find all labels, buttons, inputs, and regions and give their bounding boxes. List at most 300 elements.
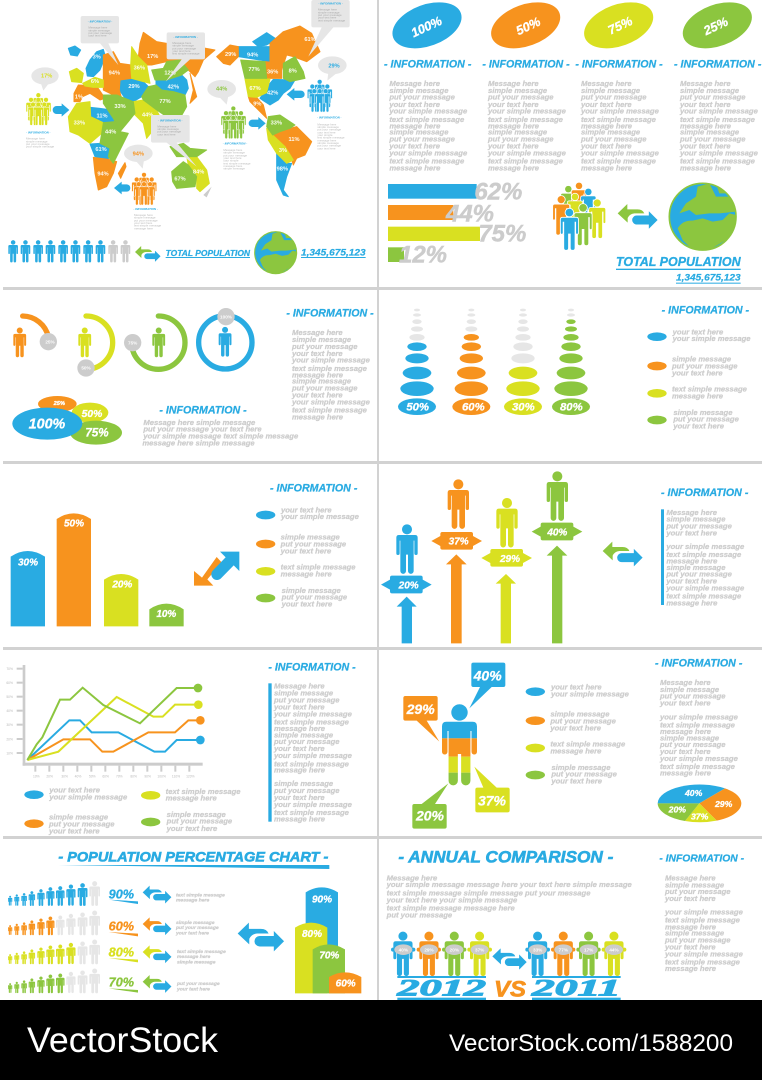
text block lower: message here simple message — [142, 438, 255, 447]
2012 figures: 20% — [450, 947, 460, 952]
map percentage labels: 29% — [225, 52, 236, 58]
text block right: text simple message — [665, 916, 741, 925]
info note blue crowd: put your message — [317, 128, 341, 132]
text column 1: text simple message — [389, 157, 465, 166]
text block right: Message here — [665, 874, 716, 883]
text column 3: put your message — [580, 93, 647, 102]
heading: - INFORMATION - — [268, 661, 356, 673]
axis labels: 50% — [89, 774, 96, 778]
stack 80%: 80% — [560, 401, 583, 413]
axis labels: 110% — [172, 774, 180, 778]
horizontal bar chart: 62% — [474, 178, 522, 205]
2011 label: 2011 — [530, 976, 621, 1002]
column 50% — [57, 513, 91, 626]
info note yellow crowd: - INFORMATION - — [26, 130, 51, 134]
callout 29% — [403, 696, 439, 742]
text block lower: your simple message text simple message — [142, 432, 299, 441]
map callout: europe: Message here — [88, 26, 108, 30]
row label 70%: 70% — [109, 976, 134, 990]
heading: - INFORMATION - — [661, 487, 749, 499]
speech bubble 29% — [318, 56, 347, 81]
legend: your text here — [671, 368, 723, 377]
info note orange crowd — [133, 207, 162, 230]
text block right: your simple message — [291, 397, 371, 406]
text block: Message here — [666, 508, 718, 517]
double arrow — [135, 246, 161, 263]
text column 4: your simple message — [679, 148, 759, 157]
text block: Message here — [660, 678, 711, 687]
text column 3: your simple message — [580, 148, 660, 157]
legend: your text here — [550, 777, 603, 786]
people row orange 60% — [8, 910, 100, 935]
axis labels: 70% — [116, 774, 123, 778]
text column 3: your text here — [580, 100, 632, 109]
row arrow blue — [143, 886, 172, 904]
heading 1: - INFORMATION - — [384, 59, 472, 71]
row messages: your text here — [176, 986, 210, 992]
text block: put your message — [273, 737, 340, 746]
legend: put your message — [549, 716, 617, 725]
double arrow — [618, 204, 658, 230]
map percentage labels: 33% — [271, 121, 282, 127]
map percentage labels: 67% — [174, 177, 186, 183]
text column 2: simple message — [488, 128, 548, 137]
row label 90%: 90% — [109, 887, 134, 901]
map percentage labels: 94% — [247, 53, 258, 59]
text column 4: put your message — [679, 134, 746, 143]
text column 1: your text here — [388, 141, 441, 150]
info note blue crowd: put your message — [317, 144, 341, 148]
text block: your simple message — [273, 800, 353, 809]
row messages: simple message — [176, 920, 215, 926]
map callout: europe: simple message — [88, 28, 110, 32]
speech bubble 17% — [31, 67, 59, 91]
text block: message here — [660, 727, 712, 736]
text column 2: your simple message — [487, 148, 567, 157]
text column 4: simple message — [680, 86, 740, 95]
text block right: put your message — [291, 383, 358, 392]
row messages: text simple message — [176, 892, 225, 898]
text column 4: Message here — [680, 79, 731, 88]
axis labels: 100% — [157, 774, 166, 778]
text column 4: put your message — [679, 93, 746, 102]
info note yellow crowd: Message here — [26, 137, 45, 141]
domed bars — [295, 887, 361, 993]
axis labels — [6, 667, 195, 778]
text column 3: simple message — [581, 86, 641, 95]
text column 3: text simple message — [581, 115, 657, 124]
info note green crowd: text simple message — [223, 161, 251, 165]
map percentage labels: 12% — [164, 71, 176, 77]
text column 2: message here — [488, 122, 540, 131]
row messages: simple message — [177, 959, 216, 965]
legend: your simple message — [48, 792, 128, 801]
map callout: australia: simple message — [157, 127, 179, 131]
info note orange crowd: simple message — [134, 216, 156, 220]
text block: simple message — [660, 685, 720, 694]
population person row — [8, 240, 130, 262]
map callout: north america: Message here — [318, 8, 337, 12]
text block: Message here — [274, 682, 325, 691]
text block right: your text here — [291, 390, 343, 399]
radial 100%: 100% — [220, 314, 233, 319]
legend: your text here — [550, 682, 602, 691]
overlapping ellipses — [12, 396, 122, 445]
legend: your text here — [48, 826, 100, 835]
horizontal bar chart: 75% — [478, 221, 526, 248]
double arrow — [492, 948, 527, 971]
text column 3: put your message — [580, 134, 647, 143]
text block: text simple message — [274, 808, 350, 817]
text block left: Message here — [387, 874, 438, 883]
info note blue crowd — [317, 116, 345, 150]
text column 1: your text here — [388, 100, 441, 109]
line green — [27, 684, 202, 760]
text column 1: text simple message — [389, 115, 465, 124]
legend: put your message — [166, 817, 233, 826]
legend: put your message — [671, 361, 738, 370]
legend: put your message — [48, 819, 115, 828]
text block right: simple message — [292, 377, 352, 386]
map callout: asia: put your message — [172, 46, 196, 50]
VS label: VS — [494, 977, 526, 1002]
text block: simple message — [274, 689, 334, 698]
people row yellow 80% — [8, 939, 100, 964]
legend: put your message — [672, 415, 740, 424]
panel: percentage ovals and bars — [384, 0, 762, 284]
text block: put your message — [273, 695, 340, 704]
legend: simple message — [282, 586, 342, 595]
side rule — [268, 683, 272, 822]
speech bubble 94% — [124, 145, 153, 169]
footer band — [0, 1000, 762, 1080]
legend: text simple message — [281, 563, 356, 572]
brand: VectorStock — [27, 1020, 218, 1060]
info note yellow crowd: simple message — [26, 139, 48, 143]
text block: your text here — [659, 747, 711, 756]
text block right: message here — [665, 922, 717, 931]
map callout: australia: your text here — [157, 132, 176, 136]
map percentage labels: 3% — [93, 55, 101, 61]
arrow column 29% — [481, 498, 532, 643]
text column 1: your simple message — [388, 107, 468, 116]
text column 3: your simple message — [580, 107, 660, 116]
text block: your text here — [273, 744, 325, 753]
map percentage labels: 77% — [159, 99, 171, 105]
info note blue crowd: text simple message — [317, 136, 345, 140]
text block right: your simple message — [664, 908, 744, 917]
horizontal bar chart: 44% — [445, 201, 494, 228]
crowd icon green — [221, 106, 246, 139]
map percentage labels: 98% — [277, 167, 288, 173]
axis labels: 80% — [130, 774, 137, 778]
speech bubble 29%: 29% — [328, 63, 340, 69]
column 30% — [11, 551, 45, 626]
text block right: put your message — [664, 935, 731, 944]
legend: message here — [281, 569, 332, 578]
map callout: europe: - INFORMATION - — [88, 19, 112, 23]
info note blue crowd: Message here — [317, 122, 337, 126]
map percentage labels: 17% — [147, 54, 158, 60]
legend: your text here — [280, 505, 332, 514]
info note green crowd: your simple — [223, 159, 239, 163]
heading 3: - INFORMATION - — [575, 59, 663, 71]
stack 30%: 30% — [512, 401, 535, 413]
info note orange crowd: put your message — [134, 218, 158, 222]
info note orange crowd: message here — [134, 226, 153, 230]
chart axes — [17, 665, 203, 772]
map percentage labels: 1% — [75, 95, 83, 101]
text block: simple message — [274, 779, 334, 788]
column 30%: 30% — [18, 558, 38, 569]
text block: your text here — [273, 793, 325, 802]
text column 2: Message here — [488, 79, 539, 88]
info note green crowd: your text here — [223, 156, 242, 160]
image reference: VectorStock.com/1588200 — [449, 1030, 733, 1057]
text block right: your text here — [664, 894, 716, 903]
legend: text simple message — [166, 787, 241, 796]
text column 3: your text here — [580, 141, 632, 150]
legend — [256, 505, 360, 609]
info note green crowd: message here — [223, 164, 243, 168]
legend: your text here — [672, 422, 725, 431]
map percentage labels: 77% — [248, 67, 260, 73]
map percentage labels: 67% — [249, 86, 261, 92]
info note orange crowd: text simple message — [134, 224, 162, 228]
text column 2: message here — [488, 163, 540, 172]
heading 2: - INFORMATION - — [482, 59, 570, 71]
text block: message here — [274, 724, 326, 733]
text column 1: message here — [389, 122, 441, 131]
text block: your simple message — [665, 584, 745, 593]
panel: world map — [8, 0, 367, 274]
2011 figures: 17% — [584, 947, 594, 952]
row arrow yellow — [143, 945, 172, 964]
text column 4: your text here — [679, 141, 731, 150]
text block: your text here — [665, 577, 718, 586]
axis labels: 10% — [33, 774, 40, 778]
domed bars: 80% — [302, 929, 322, 940]
map callout: north america: simple message — [318, 10, 340, 14]
oval 50% — [485, 0, 567, 57]
legend: message here — [166, 794, 217, 803]
text block: message here — [666, 557, 718, 566]
text column 3: simple message — [581, 128, 641, 137]
row messages: text simple message — [177, 949, 226, 955]
map callout: europe: put your message — [88, 31, 112, 35]
legend: simple message — [281, 533, 341, 542]
text block: put your message — [665, 570, 733, 579]
oval 100% — [386, 0, 468, 57]
map percentage labels: 33% — [74, 121, 85, 127]
text block: simple message — [666, 563, 726, 572]
info note blue crowd: your text here — [317, 146, 336, 150]
text column 1: simple message — [389, 86, 449, 95]
text block: text simple message — [274, 718, 350, 727]
info note green crowd: simple message — [223, 151, 245, 155]
map percentage labels: 42% — [168, 85, 179, 91]
column 10%: 10% — [156, 609, 176, 620]
text column 4: message here — [680, 122, 732, 131]
legend: simple message — [550, 710, 610, 719]
info note orange crowd: your text here — [134, 221, 153, 225]
row label 60%: 60% — [109, 919, 134, 933]
radial 50%: 50% — [81, 366, 92, 371]
info note blue crowd: message here — [317, 138, 337, 142]
row messages: message here — [176, 897, 209, 903]
world map: countries — [68, 26, 320, 197]
map percentage labels: 6% — [91, 79, 99, 85]
legend: your text here — [166, 824, 218, 833]
legend: your simple message — [280, 512, 360, 521]
2012 figures: 40% — [399, 947, 409, 952]
axis labels: 40% — [75, 774, 81, 778]
title: - POPULATION PERCENTAGE CHART - — [58, 849, 329, 865]
text column 2: text simple message — [488, 157, 564, 166]
text block right: simple message — [292, 335, 352, 344]
domed bars: 90% — [312, 894, 332, 905]
arrow to africa — [53, 103, 69, 117]
overlapping ellipses: 75% — [85, 427, 109, 440]
pie chart: 40% — [684, 788, 703, 798]
info note yellow crowd — [26, 130, 55, 149]
text block left: text simple message simple message put your message — [387, 889, 591, 898]
crowd icon orange — [132, 172, 157, 205]
text block: your text here — [665, 528, 718, 537]
legend: your simple message — [550, 689, 630, 698]
callout 37% — [474, 767, 510, 812]
2011 figures: 77% — [559, 947, 569, 952]
heading: - INFORMATION - — [655, 658, 743, 670]
row label 80%: 80% — [109, 945, 134, 959]
row messages: put your message — [175, 925, 219, 931]
text block right: message here — [292, 412, 344, 421]
column 50%: 50% — [64, 519, 84, 530]
legend: simple message — [673, 408, 733, 417]
axis labels: 60% — [6, 681, 13, 685]
arrow to south america — [249, 117, 266, 130]
map callout: north america: - INFORMATION - — [318, 1, 343, 5]
horizontal bar chart — [388, 178, 526, 269]
legend: your text here — [48, 785, 101, 794]
text block right: simple message — [665, 929, 725, 938]
info note green crowd: simple message — [223, 167, 245, 171]
map callout: asia: Message here — [172, 41, 192, 45]
map percentage labels: 3% — [279, 148, 287, 154]
heading: - INFORMATION - — [270, 482, 358, 494]
panel: population percentage chart — [8, 849, 361, 994]
text block: message here — [274, 766, 326, 775]
text block: your simple message — [273, 751, 353, 760]
legend: message here — [550, 746, 602, 755]
pie chart — [658, 784, 741, 822]
row messages: your text here — [175, 930, 209, 936]
map percentage labels: 94% — [109, 70, 120, 76]
text block: put your message — [665, 521, 733, 530]
axis labels: 90% — [144, 774, 151, 778]
radial 25% — [13, 316, 57, 357]
oval 100%: 100% — [409, 14, 444, 40]
text block right: your simple message — [291, 356, 371, 365]
legend — [24, 785, 241, 835]
speech bubble 17%: 17% — [41, 74, 52, 80]
radial 25%: 25% — [45, 339, 56, 344]
axis labels: 60% — [102, 774, 109, 778]
arrow column 29%: 29% — [499, 554, 520, 565]
axis labels: 50% — [6, 695, 13, 699]
text block: simple message — [274, 730, 334, 739]
double arrow — [603, 542, 643, 568]
axis labels: 120% — [186, 774, 195, 778]
speech bubble 44% — [207, 80, 236, 105]
row arrow orange — [143, 917, 172, 936]
text block: your text here — [659, 699, 711, 708]
population number: 1,345,675,123 — [676, 273, 741, 283]
text column 4: simple message — [680, 128, 740, 137]
text column 3: Message here — [581, 79, 632, 88]
title: - ANNUAL COMPARISON - — [398, 848, 614, 867]
text column 4: text simple message — [680, 157, 756, 166]
radial 100% — [199, 308, 252, 369]
text block right: your simple message — [664, 949, 744, 958]
line yellow — [27, 697, 203, 760]
text block: text simple message — [660, 721, 736, 730]
map callout: asia: simple message — [172, 44, 194, 48]
legend: your simple message — [672, 334, 751, 343]
axis labels: 10% — [6, 751, 13, 755]
text column 4: your text here — [679, 100, 731, 109]
map percentage labels: 11% — [96, 114, 108, 120]
oval 25% — [676, 0, 758, 57]
legend — [526, 682, 630, 786]
panel: radial progress — [12, 308, 374, 447]
legend: your text here — [549, 723, 602, 732]
map percentage labels: 44% — [142, 112, 153, 118]
text column 2: put your message — [487, 134, 554, 143]
horizontal bar chart: 12% — [399, 242, 447, 269]
total population label: TOTAL POPULATION — [166, 248, 251, 258]
text column 1: message here — [389, 163, 441, 172]
text column 1: put your message — [388, 134, 456, 143]
map callout: australia: Message here — [157, 124, 177, 128]
text block left: your simple message message here your text here simple message — [386, 880, 633, 889]
2012 label: 2012 — [395, 976, 487, 1002]
text block: text simple message — [666, 592, 742, 601]
map callout: asia: text simple message — [172, 52, 200, 56]
overlapping ellipses: 25% — [53, 401, 65, 407]
text block left: text simple message message here — [387, 904, 516, 913]
globe — [669, 183, 736, 250]
text block: simple message — [660, 733, 720, 742]
segmented person — [442, 704, 477, 786]
oval 50%: 50% — [514, 15, 543, 38]
globe — [255, 232, 297, 274]
heading: - INFORMATION - — [659, 854, 745, 865]
2011 figures — [525, 932, 626, 976]
map callout: europe — [81, 16, 119, 65]
text column 2: your text here — [487, 141, 539, 150]
callout 37%: 37% — [478, 793, 507, 809]
map callout: north america: put your message — [318, 13, 342, 17]
row messages: put your message — [176, 981, 220, 987]
legend — [647, 327, 751, 431]
text column 2: text simple message — [488, 115, 564, 124]
callout 29%: 29% — [406, 701, 435, 717]
panel: ellipse stacks — [398, 304, 751, 431]
text column 2: your text here — [487, 100, 539, 109]
text block: message here — [666, 598, 718, 607]
text block: your simple message — [659, 754, 739, 763]
